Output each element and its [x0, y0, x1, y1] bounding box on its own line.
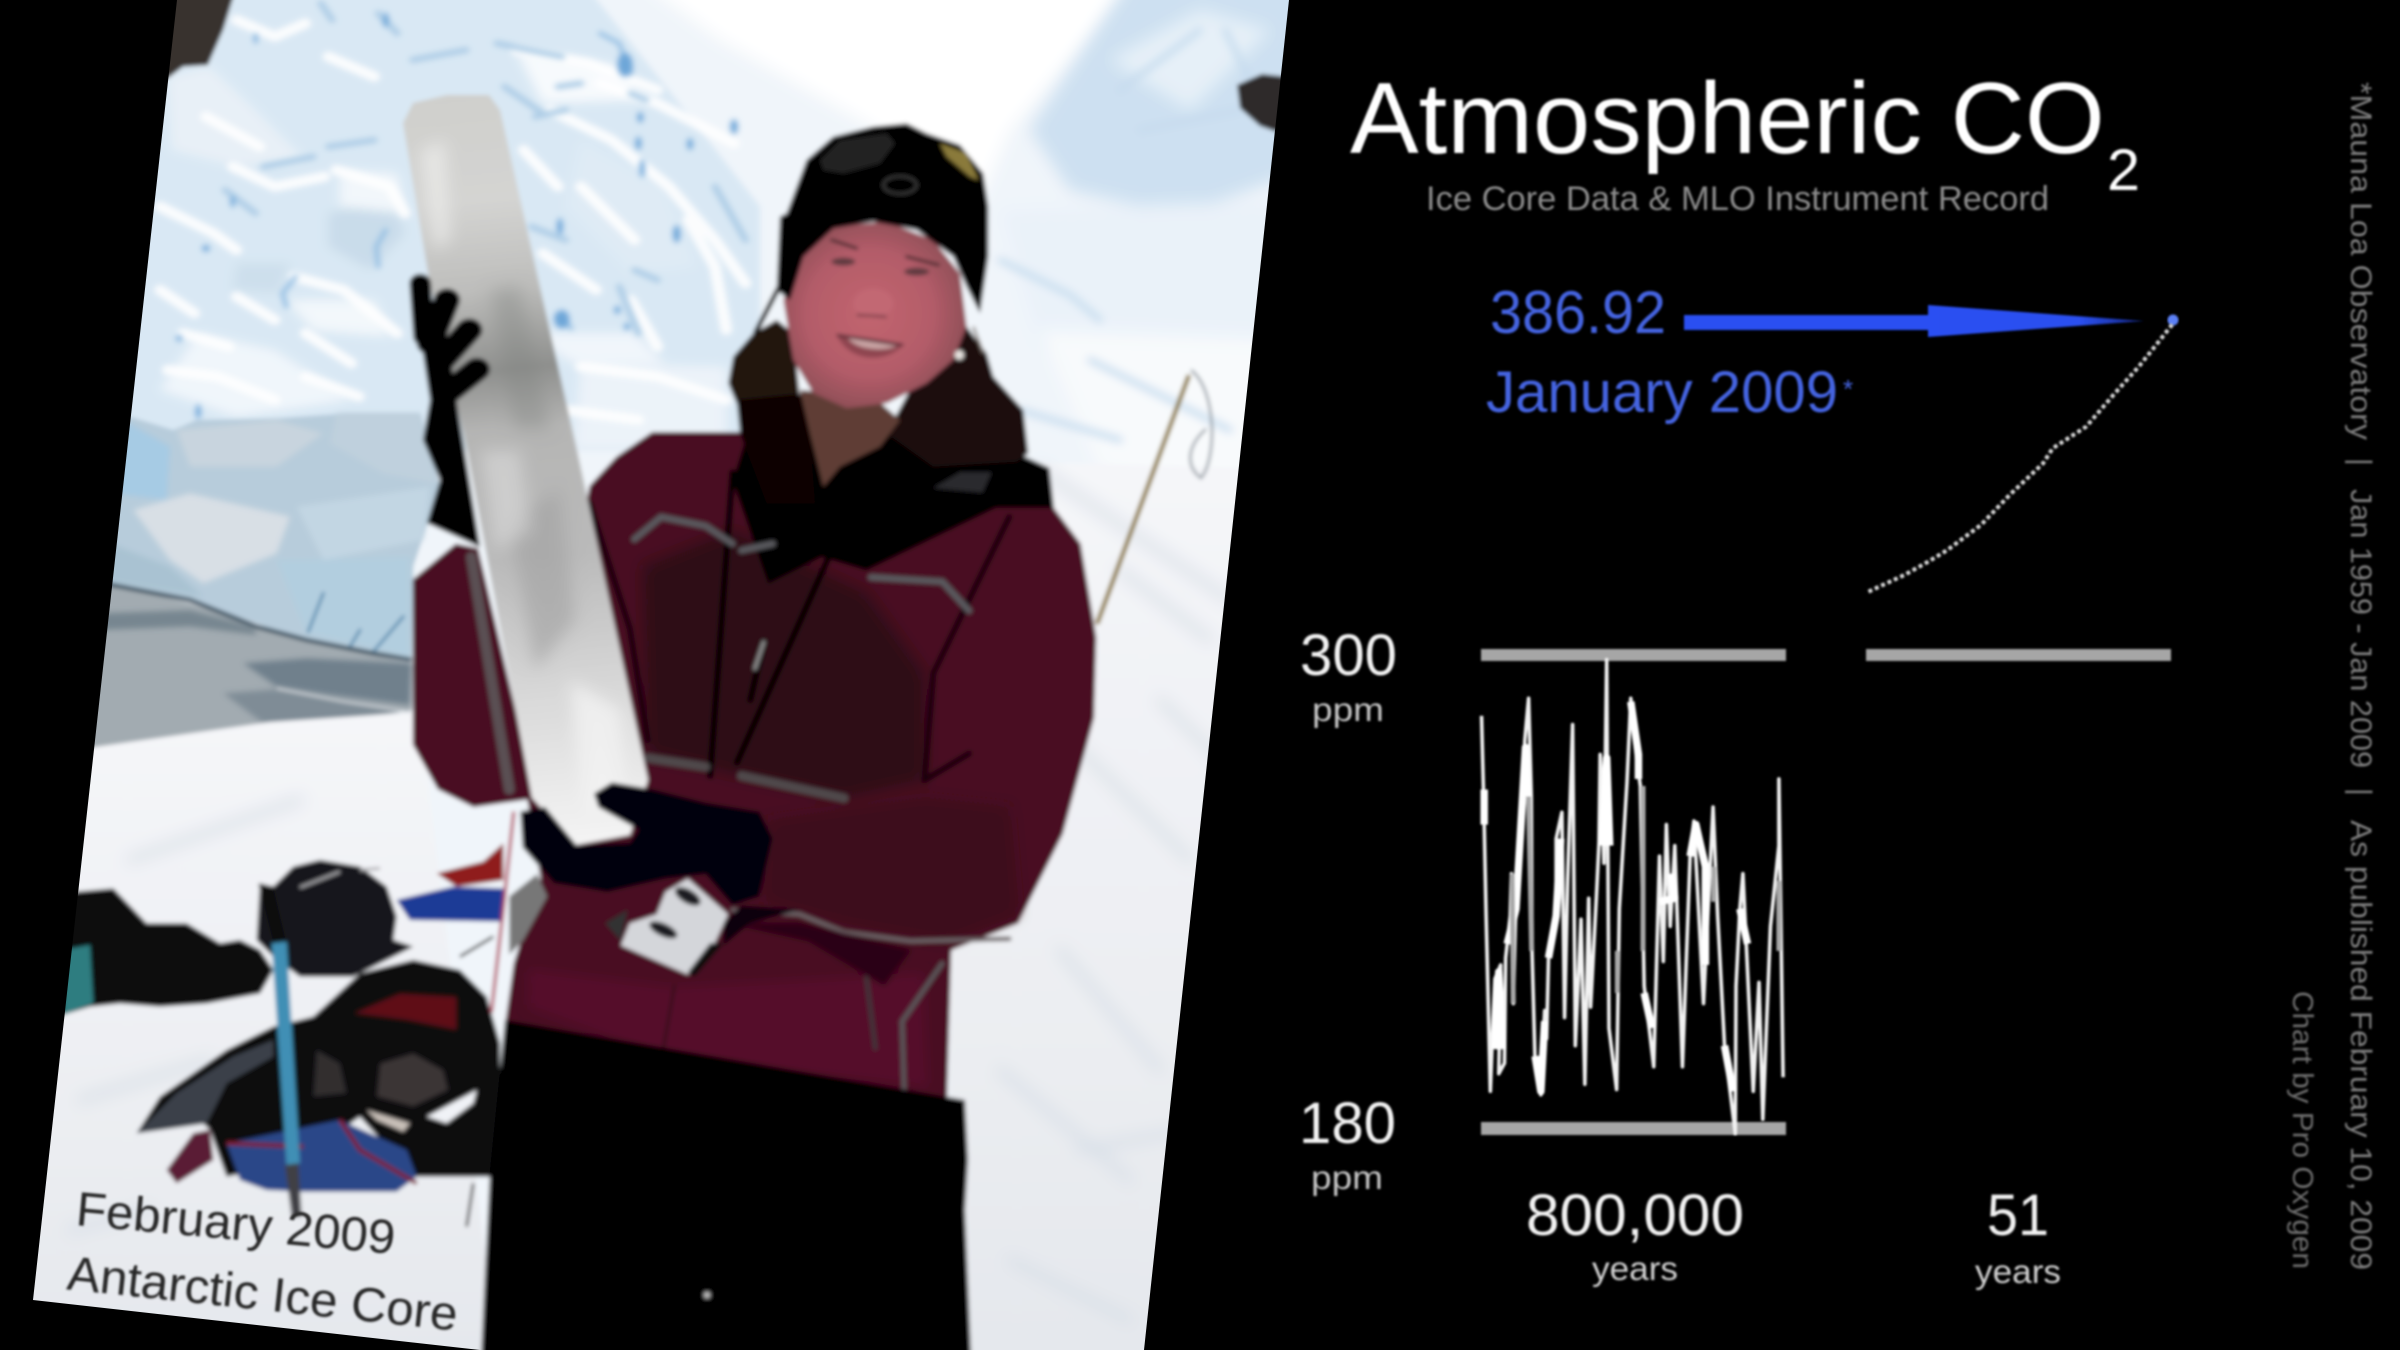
left glove [415, 283, 480, 547]
y label: 300 ppm: 300 [1300, 623, 1397, 688]
binoculars [605, 879, 799, 977]
y label: 180 ppm [1299, 1091, 1396, 1196]
snow texture [97, 466, 1225, 1160]
source note (vertical): | [2344, 458, 2377, 466]
hair [728, 320, 1028, 503]
y label: 180 ppm: ppm [1311, 1159, 1383, 1196]
chart: ice core CO2 record [1482, 660, 1783, 1133]
ice core [403, 95, 648, 845]
torso [505, 432, 1096, 1111]
shaded chest [643, 530, 924, 798]
straps and seams [471, 472, 1009, 1097]
hat strap [755, 288, 778, 333]
source note (vertical): *Mauna Loa Observatory [2344, 82, 2377, 440]
y label: 300 ppm: ppm [1312, 691, 1384, 728]
right glove [520, 783, 773, 905]
arrow [1684, 305, 2144, 337]
source note (vertical): As published February 10, 2009 [2344, 820, 2377, 1270]
x label: 51 years: years [1975, 1253, 2061, 1290]
axis line: 300 ppm, ice core [1481, 649, 1786, 661]
shaded right forearm [764, 798, 1018, 941]
sunglasses [820, 133, 978, 194]
ice axe handle [272, 942, 300, 1167]
tripod legs [460, 937, 493, 1227]
red panel [353, 993, 457, 1030]
latest data point [2168, 314, 2178, 326]
rock, top right [1234, 72, 1281, 134]
callout date: January 2009 [1486, 360, 1838, 425]
distant duffel [57, 888, 273, 1017]
collar fold [933, 472, 991, 492]
top backpack [257, 860, 413, 977]
chart: instrument record curve [1869, 323, 2173, 592]
grey bag [313, 1050, 347, 1097]
x label: 51 years: 51 [1987, 1183, 2049, 1248]
foreground snow, right [944, 468, 1230, 1350]
axis line: 300 ppm, instrument [1866, 649, 2171, 661]
bright upper valley [670, 0, 1112, 191]
bag trim [227, 1120, 417, 1183]
ski pole with wrist loop [1097, 370, 1212, 624]
hat [777, 123, 988, 313]
credit (vertical): Chart by Pro Oxygen [2286, 991, 2318, 1269]
lower backpack [137, 960, 500, 1177]
photo: researcher holding Antarctic ice core [0, 0, 1350, 1350]
white paper [427, 1090, 477, 1123]
backpack highlights [300, 868, 380, 887]
grey pack behind hip [509, 874, 547, 954]
water and far shore [90, 583, 412, 750]
blue bag [227, 1120, 417, 1192]
ice axe spike [285, 1163, 302, 1217]
ice core mottling [420, 140, 625, 820]
blue tarp [397, 887, 503, 922]
source note (vertical): Jan 1959 - Jan 2009 [2344, 489, 2377, 768]
maroon pouch [167, 1130, 213, 1183]
source note (vertical): | [2344, 788, 2377, 796]
teal pad [63, 945, 93, 1015]
title: 2 [2107, 138, 2140, 203]
grey flap [137, 1040, 273, 1133]
glacier ice face [90, 413, 440, 750]
grey gear [377, 1053, 448, 1107]
neck [800, 390, 900, 487]
snow and sky base [168, 0, 1271, 1263]
x label: 800,000 years: 800,000 [1526, 1183, 1744, 1248]
right slope texture [996, 27, 1243, 446]
glacier seracs [60, 0, 760, 450]
foreground snow, left [0, 712, 500, 1350]
photo caption: date: February 2009 [74, 1183, 397, 1265]
shadow below arm [728, 923, 911, 986]
subtitle: Ice Core Data & MLO Instrument Record [1426, 180, 2049, 218]
x label: 800,000 years [1526, 1183, 1744, 1287]
rock, top left [168, 0, 236, 81]
person: head [728, 123, 1028, 503]
red bag [437, 843, 503, 887]
y label: 180 ppm: 180 [1299, 1091, 1396, 1156]
y label: 300 ppm [1300, 623, 1397, 728]
source note (vertical) [2344, 82, 2377, 1270]
facial features [831, 240, 983, 360]
x label: 51 years [1975, 1183, 2061, 1290]
person: jacket and trousers [413, 423, 1096, 1164]
dark collar and inner layer [732, 423, 1054, 584]
axis line: 180 ppm, ice core [1481, 1122, 1786, 1135]
gear on the snow [57, 843, 503, 1227]
ice axe shaft [258, 883, 287, 943]
red cord [491, 812, 514, 1012]
callout value: 386.92 [1490, 279, 1666, 346]
trousers waist [496, 1026, 967, 1164]
trousers legs [480, 1020, 972, 1350]
photo caption: subject: Antarctic Ice Core [65, 1247, 460, 1342]
callout date: * [1843, 374, 1853, 404]
face [783, 222, 967, 408]
scrap [367, 1110, 410, 1132]
left sleeve [413, 544, 536, 807]
lower torso [527, 968, 929, 1088]
right slope [1028, 0, 1289, 215]
x label: 800,000 years: years [1592, 1250, 1678, 1287]
title: Atmospheric CO [1350, 63, 2105, 175]
